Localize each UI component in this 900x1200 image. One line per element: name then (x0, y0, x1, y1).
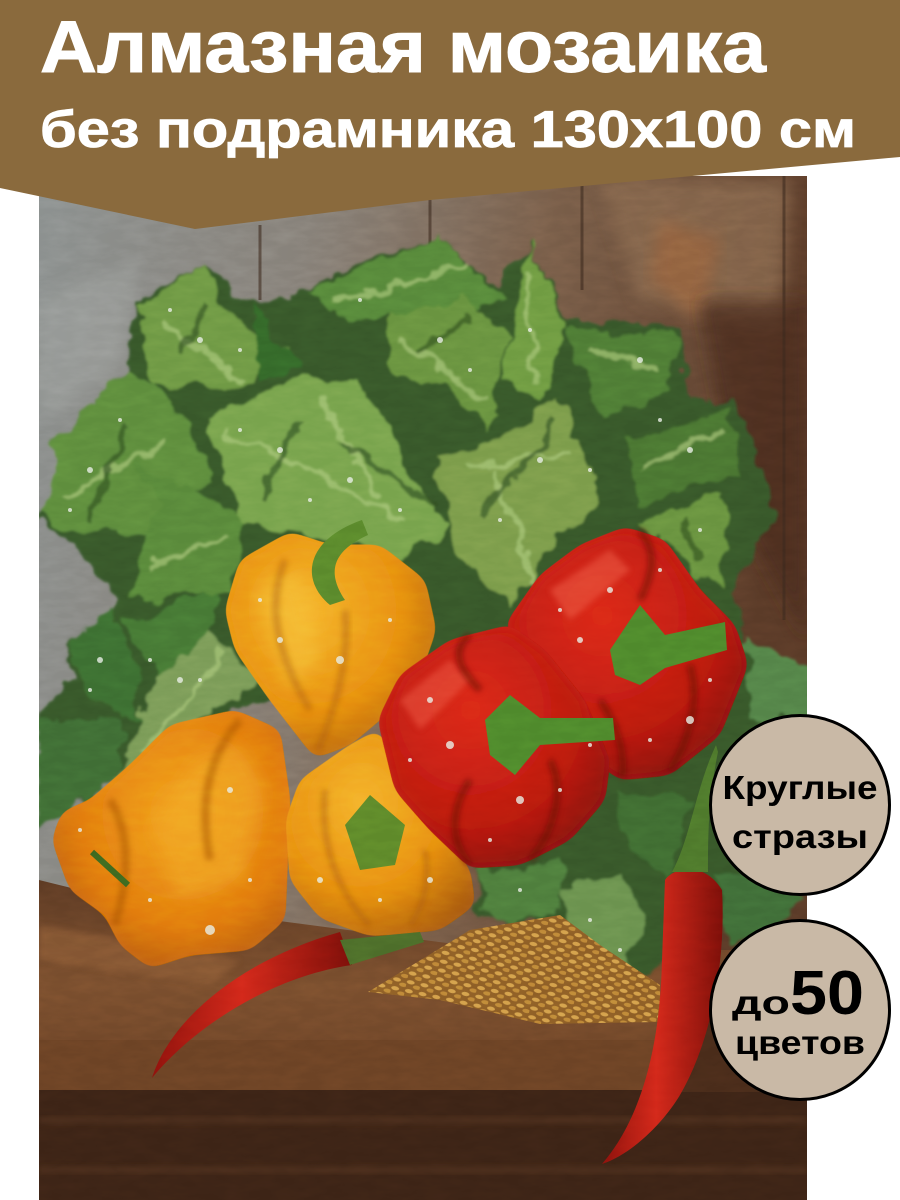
icon: lower left orange pepper (52, 710, 290, 968)
wheat grains pile (368, 915, 660, 1024)
wooden wall background (39, 176, 807, 1006)
table top and front (39, 880, 807, 1200)
icon: vertical chili pepper (602, 745, 723, 1164)
lettuce leaves (39, 235, 807, 980)
badge: up to 50 colours: до (732, 984, 790, 1021)
badge: up to 50 colours: цветов (735, 1024, 865, 1061)
badge: up to 50 colours: 50 (790, 959, 864, 1028)
header banner (0, 0, 900, 229)
badge: up to 50 colours (710, 920, 890, 1100)
icon: upper yellow pepper (225, 520, 436, 758)
badge: round rhinestones: Круглые (722, 769, 878, 806)
icon: right red pepper (505, 527, 748, 780)
painting: peppers still life (39, 176, 807, 1200)
paint texture overlay (39, 205, 783, 1040)
icon: horizontal chili pepper (152, 932, 424, 1078)
badge: round rhinestones: стразы (732, 818, 868, 855)
icon: middle orange pepper (286, 730, 475, 936)
water droplets (68, 298, 712, 952)
badge: round rhinestones (710, 716, 890, 894)
title line 2: без подрамника 130х100 см (40, 101, 856, 159)
icon: center red pepper (378, 625, 615, 868)
title line 1: Алмазная мозаика (40, 7, 768, 88)
